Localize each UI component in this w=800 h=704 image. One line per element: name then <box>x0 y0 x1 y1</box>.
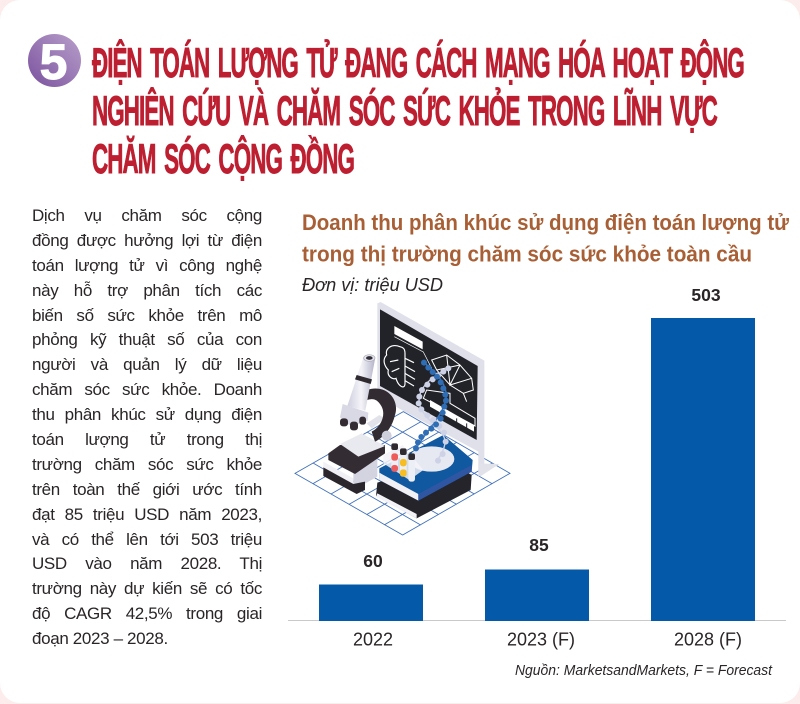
body text: đồng được hưởng lợi từ điện <box>32 231 262 250</box>
body text: và có thể lên tới 503 triệu <box>32 530 262 549</box>
floor grid <box>295 412 510 535</box>
whiteboard <box>367 302 499 477</box>
bar: 2023: 85 <box>529 535 549 555</box>
unit label: Đơn vị: triệu USD <box>302 274 443 295</box>
icon: number 5 badge: 5 <box>40 34 67 90</box>
body text: này hỗ trợ phân tích các <box>32 281 262 300</box>
illustration: laboratory with microscope, DNA, books <box>295 302 510 535</box>
axis line <box>288 620 786 621</box>
body text: toán lượng tử vì công nghệ <box>32 256 262 275</box>
microscope <box>323 355 396 494</box>
body text <box>32 206 262 648</box>
body text: trường này dự kiến sẽ có tốc <box>32 579 262 598</box>
board rows <box>423 390 475 426</box>
stacked books <box>376 435 473 518</box>
body text: trường chăm sóc sức khỏe <box>32 455 262 474</box>
bar: 2023 <box>485 535 589 650</box>
polygon brain <box>432 355 473 402</box>
bar chart <box>288 285 786 650</box>
bar: 2023: 2023 (F) <box>507 630 575 650</box>
DNA helix <box>413 360 451 464</box>
body text: Dịch vụ chăm sóc cộng <box>32 206 262 225</box>
body text: USD vào năm 2028. Thị <box>32 554 262 573</box>
chart heading: trong thị trường chăm sóc sức khỏe toàn cầu <box>302 242 752 266</box>
bar: 2028: 2028 (F) <box>674 630 742 650</box>
bar: 2028 <box>651 285 755 650</box>
bar: 2022 <box>319 551 423 650</box>
icon: number 5 badge <box>28 34 81 90</box>
body text: thu phân khúc sử dụng điện <box>32 405 262 424</box>
bar: 2022: 60 <box>363 551 383 571</box>
body text: biến số sức khỏe trên mô <box>32 306 262 325</box>
body text: độ CAGR 42,5% trong giai <box>32 604 262 623</box>
chart heading <box>302 210 789 266</box>
body text: đạt 85 triệu USD năm 2023, <box>32 505 262 524</box>
body text: trên toàn thế giới ước tính <box>32 480 262 499</box>
title: CHĂM SÓC CỘNG ĐỒNG <box>92 134 355 183</box>
title: ĐIỆN TOÁN LƯỢNG TỬ ĐANG CÁCH MẠNG HÓA HOẠT ĐỘNG <box>92 38 745 87</box>
body text: toán lượng tử trong thị <box>32 430 262 449</box>
title: NGHIÊN CỨU VÀ CHĂM SÓC SỨC KHỎE TRONG LĨNH VỰC <box>92 88 718 135</box>
source note: Nguồn: MarketsandMarkets, F = Forecast <box>515 662 773 679</box>
title <box>92 38 745 183</box>
bar: 2028: 503 <box>691 285 721 305</box>
body text: chăm sóc sức khỏe. Doanh <box>32 380 262 399</box>
body text: người và quản lý dữ liệu <box>32 355 262 374</box>
body text: phỏng kỹ thuật số của con <box>32 330 262 349</box>
body text: đoạn 2023 – 2028. <box>32 629 168 648</box>
bar: 2022: 2022 <box>353 630 393 650</box>
brain outline <box>384 346 415 387</box>
test tube rack <box>383 443 423 482</box>
